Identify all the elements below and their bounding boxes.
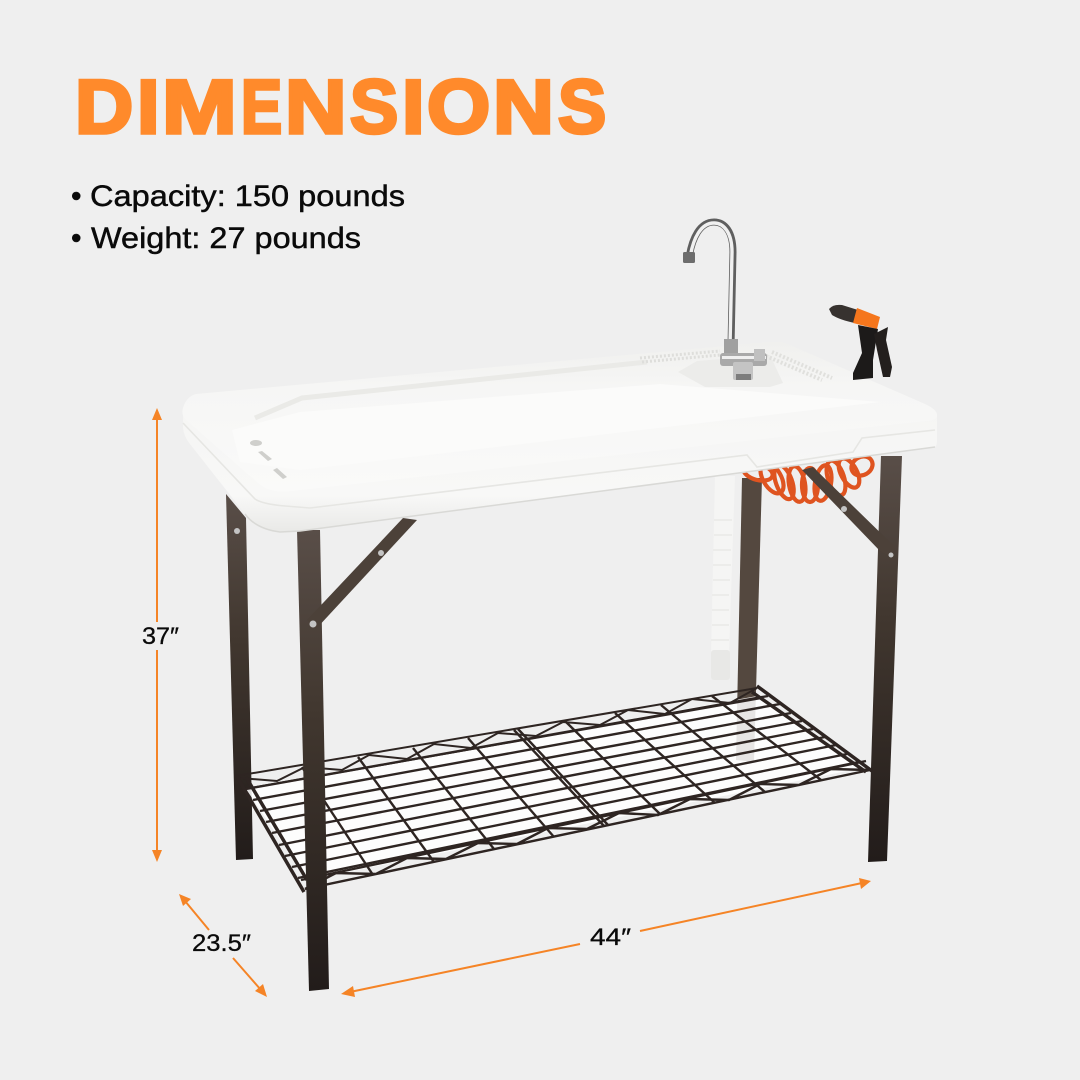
front band [301, 761, 870, 889]
edge groove [183, 423, 935, 508]
title: M [162, 65, 236, 150]
back left leg [226, 494, 253, 860]
spec: capacity: Capacity: 150 pounds [90, 180, 405, 213]
title: O [427, 65, 490, 150]
right end band [752, 686, 872, 772]
table surface [182, 342, 937, 492]
dimension: width 44 inches: 44″ [590, 924, 632, 951]
title: N [285, 65, 346, 150]
title: E [241, 65, 282, 150]
table bottom shading [245, 447, 935, 532]
left end band [236, 775, 307, 892]
surface ridge [255, 362, 647, 418]
faucet [683, 222, 767, 380]
faucet base [724, 339, 738, 356]
front right leg [868, 456, 902, 862]
dimension: depth 23.5 inches [179, 894, 267, 997]
front left leg [297, 530, 329, 991]
hose spray nozzle [829, 305, 892, 380]
title: S [350, 65, 398, 150]
right folding brace [802, 467, 895, 558]
shelf surface [246, 696, 862, 880]
nozzle tip [829, 305, 858, 323]
dimension: height 37 inches [142, 408, 180, 862]
spec: weight: Weight: 27 pounds [91, 222, 361, 255]
left folding brace [234, 518, 417, 629]
dimension: height 37 inches: 37″ [142, 623, 180, 650]
title: I [137, 65, 160, 150]
product: fish cleaning table [182, 222, 937, 991]
drain slots [250, 440, 287, 479]
spec: weight: • [71, 222, 82, 255]
coiled orange hose [741, 453, 876, 503]
orange collar [853, 308, 880, 329]
handle [853, 325, 878, 380]
spec: capacity: • [71, 180, 82, 213]
drain hose [711, 476, 735, 680]
table top [182, 342, 937, 532]
trigger [874, 327, 892, 377]
centre double wire [514, 729, 608, 826]
sink well [678, 355, 783, 387]
title: D [75, 65, 133, 150]
title: N [493, 65, 554, 150]
title: I [402, 65, 424, 150]
faucet spout [689, 222, 733, 346]
longitudinal wires [246, 696, 859, 878]
drain board ribs [640, 351, 720, 362]
title [75, 65, 606, 150]
title: S [558, 65, 606, 150]
back right leg [736, 478, 762, 762]
specification list [71, 180, 405, 255]
lower wire shelf [236, 686, 872, 892]
back band [236, 688, 762, 789]
cross wires [302, 696, 821, 875]
surface highlight [232, 384, 880, 470]
dimension: width 44 inches [341, 878, 871, 997]
table edge [183, 410, 937, 532]
dimension: depth 23.5 inches: 23.5″ [192, 930, 252, 957]
